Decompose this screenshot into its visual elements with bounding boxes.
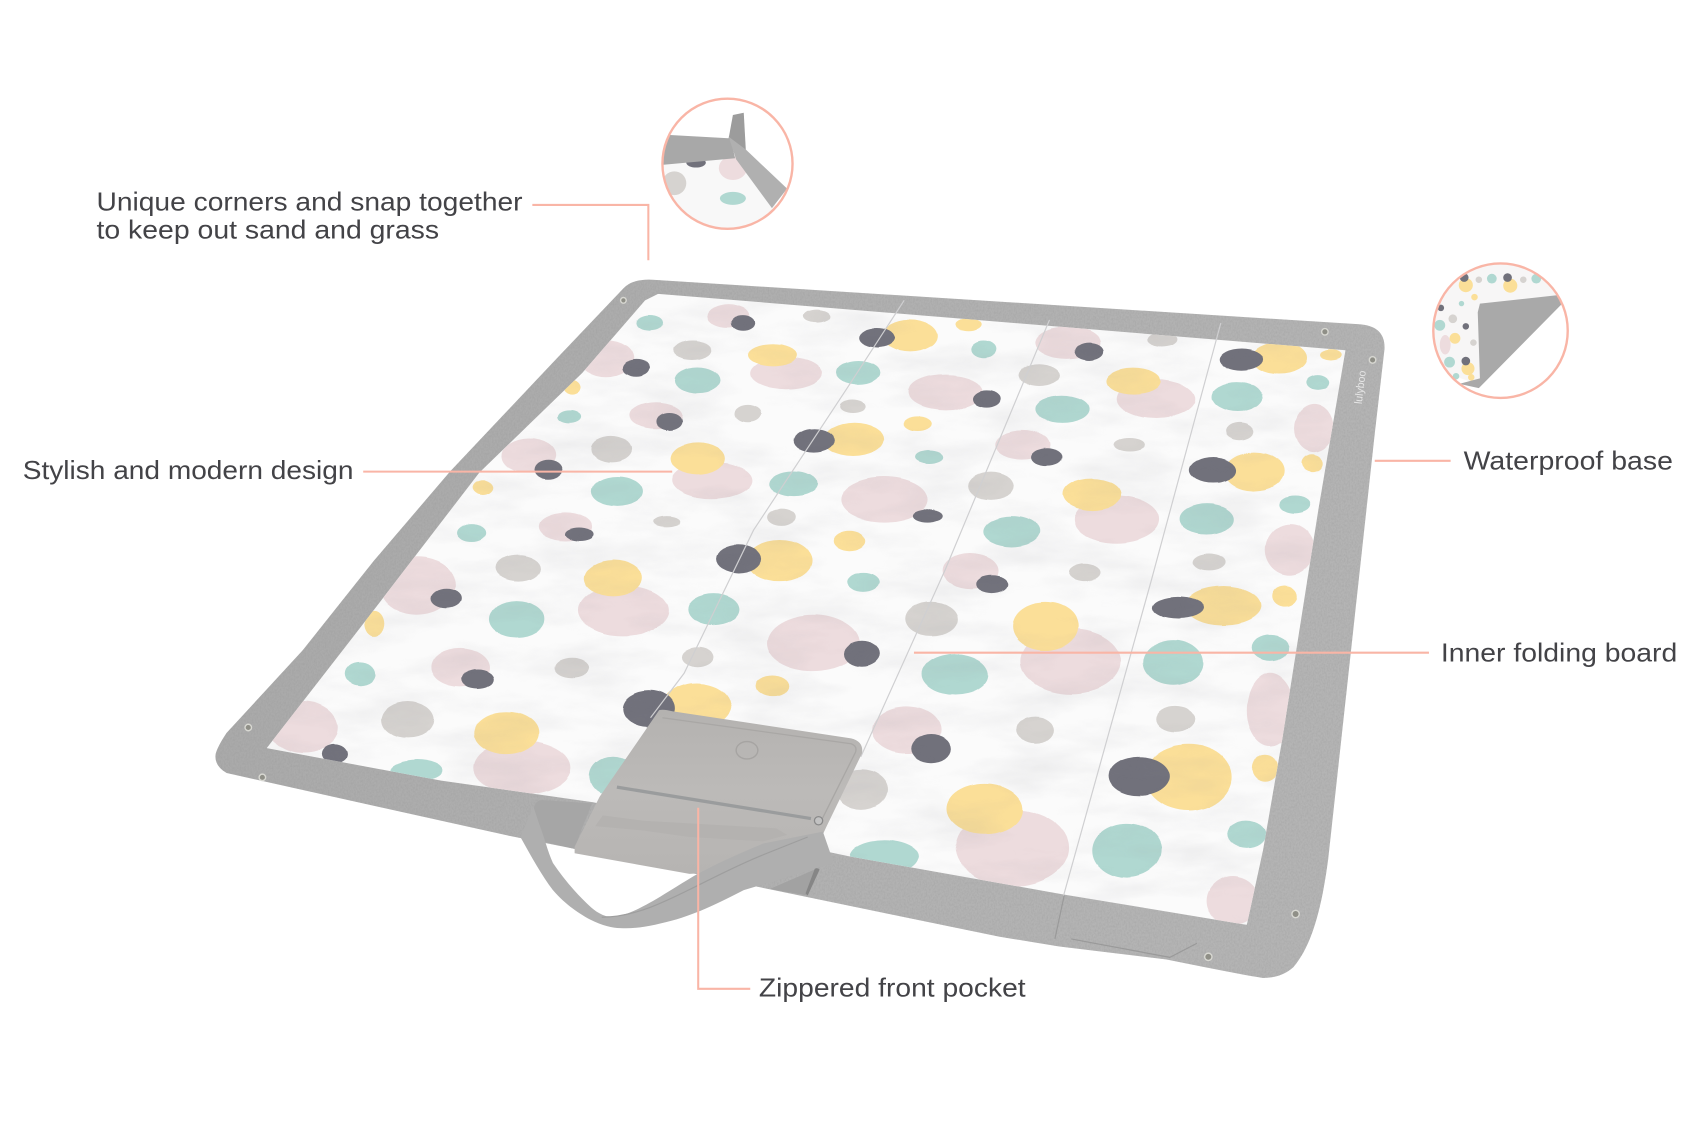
snap buttons (245, 298, 1376, 960)
logo emboss (736, 742, 758, 759)
picnic mat (215, 280, 1385, 978)
leader line (532, 205, 648, 260)
inset circle: snap corner (656, 99, 793, 239)
pink dots (269, 305, 1334, 926)
inset circle: waterproof corner (1429, 260, 1568, 398)
strap crease (602, 837, 808, 917)
label text: Stylish and modern design (23, 455, 353, 485)
shoulder strap (520, 807, 834, 928)
fold shadow (806, 867, 820, 896)
brand text: lulyboo (1353, 370, 1369, 405)
leader line (914, 652, 1429, 654)
fold seams (651, 300, 1221, 896)
leader line (698, 808, 750, 989)
label text second line: to keep out sand and grass (96, 215, 439, 245)
lower pocket band (595, 815, 787, 841)
label text: Zippered front pocket (759, 972, 1026, 1002)
leader line (1375, 460, 1451, 462)
zipper (617, 787, 811, 819)
leader line (363, 471, 672, 473)
polka dot print (269, 305, 1342, 926)
callout: zippered pocket (698, 808, 1026, 1002)
pocket front (575, 710, 862, 874)
label text: Inner folding board (1441, 637, 1677, 667)
strap buckle loop (533, 800, 592, 849)
fabric texture (215, 280, 1385, 978)
fabric border (215, 280, 1385, 978)
teal dots (345, 316, 1329, 877)
dark fold behind strap (770, 867, 820, 896)
pocket bag (520, 710, 862, 928)
infographic canvas (24, 98, 1676, 1002)
label text: Unique corners and snap together (96, 186, 523, 216)
dark dots (321, 317, 1263, 796)
taupe dots (382, 310, 1253, 809)
wrinkle shading (356, 314, 1320, 894)
yellow dots (364, 318, 1342, 834)
label text: Waterproof base (1464, 445, 1673, 475)
printed panel (260, 282, 1355, 932)
border crease (1055, 893, 1197, 957)
callout: unique corners (96, 186, 648, 260)
zipper pull (814, 817, 823, 825)
pocket top stitching (662, 718, 856, 820)
